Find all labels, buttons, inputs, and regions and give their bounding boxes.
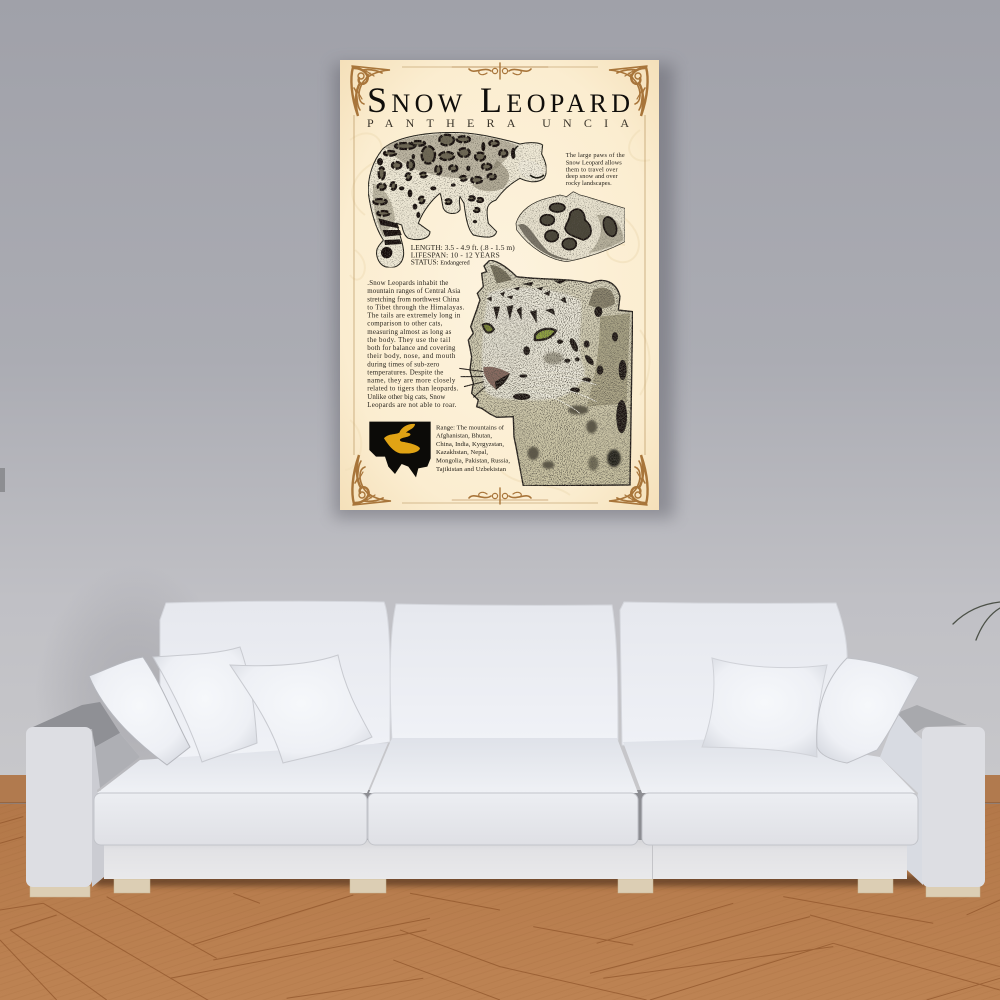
sofa base <box>104 835 907 879</box>
sofa floor shadow <box>96 875 926 886</box>
body text: their body, nose, and mouth <box>367 353 456 360</box>
range text: Afghanistan, Bhutan, <box>436 433 492 440</box>
body text: comparison to other cats, <box>367 321 443 328</box>
wall shading near sofa <box>0 468 235 835</box>
caption: paws: Snow Leopard allows <box>566 159 622 166</box>
ornament: top right corner <box>609 66 648 116</box>
right seat cushion <box>623 738 918 845</box>
stats: length, lifespan, status: LENGTH: 3.5 - 4.9 ft. (.8 - 1.5 m) <box>411 243 515 252</box>
body text: temperatures. Despite the <box>367 370 443 376</box>
stats: length, lifespan, status <box>411 243 515 266</box>
poster paper <box>340 60 659 510</box>
range text: China, India, Kyrgyzstan, <box>436 441 504 448</box>
body text: Unlike other big cats, Snow <box>367 394 445 401</box>
range text: Range: The mountains of <box>436 424 505 432</box>
illustration: paw pads <box>516 192 625 262</box>
centre back cushion <box>390 604 618 742</box>
ornament: top centre flourish <box>452 63 548 79</box>
body text: The tails are extremely long in <box>367 312 461 320</box>
caption: paws <box>566 152 625 187</box>
caption: paws: rocky landscapes. <box>566 180 612 187</box>
sofa <box>26 601 985 897</box>
centre seat cushion <box>368 738 638 845</box>
illustration: snow leopard head portrait <box>459 260 633 486</box>
left seat cushion <box>94 743 388 845</box>
stats: length, lifespan, status: STATUS: Endangered <box>411 258 470 266</box>
caption: paws: The large paws of the <box>566 152 625 159</box>
frame lines <box>354 67 645 503</box>
title: SNOW LEOPARD <box>367 80 630 120</box>
body text: .Snow Leopards inhabit the <box>367 280 448 287</box>
body text: stretching from northwest China <box>367 296 459 303</box>
body text: to Tibet through the Himalayas. <box>367 304 465 311</box>
poster shadow <box>334 64 674 518</box>
range text <box>436 424 510 473</box>
body text: name, they are more closely <box>367 378 456 385</box>
wooden herringbone floor <box>0 804 1000 1000</box>
sofa feet <box>30 879 980 897</box>
stats: length, lifespan, status: LIFESPAN: 10 - 12 YEARS <box>411 250 500 260</box>
caption: paws: deep snow and over <box>566 173 619 180</box>
ornament: bottom right corner <box>609 455 648 505</box>
right pillow 1 <box>702 658 827 757</box>
range text: Mongolia, Pakistan, Russia, <box>436 458 510 465</box>
left armrest <box>26 702 140 887</box>
body text <box>367 280 465 409</box>
subtitle: PANTHERA UNCIA <box>367 116 629 130</box>
right armrest <box>880 705 985 887</box>
ornament: top left corner <box>351 66 390 116</box>
body text: the body. They use the tail <box>367 337 450 344</box>
gap behind seat cushions <box>100 790 912 840</box>
body text: measuring almost as long as <box>367 329 452 336</box>
right back cushion <box>620 602 850 760</box>
body text: during times of sub-zero <box>367 361 440 368</box>
body text: mountain ranges of Central Asia <box>367 288 460 295</box>
body text: Leopards are not able to roar. <box>367 402 457 409</box>
plant leaves <box>953 602 1000 640</box>
left pillow 3 <box>230 655 372 763</box>
wall background <box>0 0 1000 800</box>
poster <box>340 60 659 510</box>
damask background pattern <box>345 130 650 495</box>
ornament: bottom centre flourish <box>452 488 548 504</box>
range text: Kazakhstan, Nepal, <box>436 449 488 456</box>
right pillow 2 <box>817 658 919 763</box>
range map <box>369 422 431 477</box>
body text: related to tigers than leopards. <box>367 386 459 393</box>
left back cushion <box>160 601 390 760</box>
left pillow 2 <box>153 647 257 762</box>
left pillow 1 <box>89 657 190 765</box>
body text: both for balance and covering <box>367 345 456 352</box>
range text: Tajikistan and Uzbekistan <box>436 466 507 473</box>
illustration: full body snow leopard <box>368 132 546 267</box>
ornament: bottom left corner <box>352 455 391 505</box>
baseboard <box>0 775 1000 803</box>
caption: paws: them to travel over <box>566 166 619 173</box>
